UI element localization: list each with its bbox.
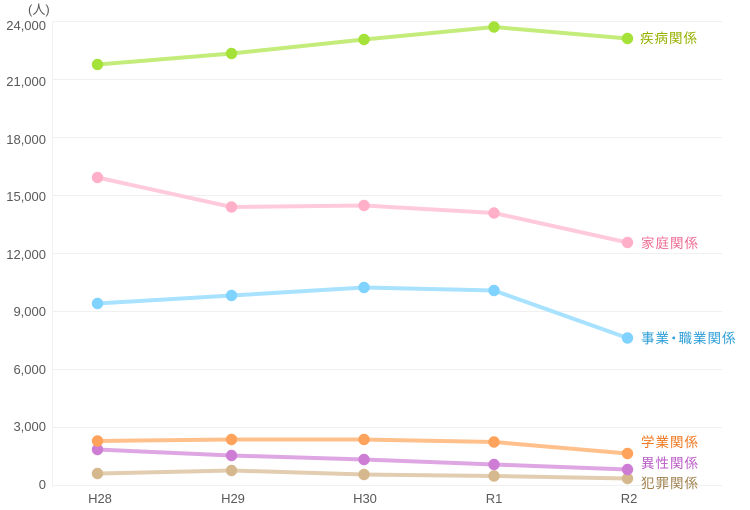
x axis labels: H28 [88, 491, 112, 506]
y axis labels: 12,000 [6, 247, 46, 262]
series: 事業・職業関係: 事業・職業関係 [641, 331, 736, 346]
series: 学業関係: 学業関係 [641, 435, 699, 450]
series: 事業・職業関係 [92, 282, 737, 346]
series: 異性関係 [92, 444, 699, 475]
x axis labels [88, 491, 637, 506]
y axis labels: 21,000 [6, 74, 46, 89]
y axis labels: 9,000 [13, 304, 46, 319]
x axis labels: H29 [221, 491, 245, 506]
x axis labels: R1 [486, 491, 502, 506]
x axis labels: H30 [353, 491, 377, 506]
y axis labels: 15,000 [6, 189, 46, 204]
y axis labels: 18,000 [6, 132, 46, 147]
series: 疾病関係 [92, 21, 698, 70]
series: 犯罪関係: 犯罪関係 [641, 476, 699, 491]
y axis labels: 24,000 [6, 18, 46, 33]
series: 異性関係: 異性関係 [641, 456, 699, 471]
series: 家庭関係: 家庭関係 [641, 235, 699, 251]
y axis labels: 3,000 [13, 419, 46, 434]
series: 疾病関係: 疾病関係 [640, 31, 698, 46]
series: 家庭関係 [92, 172, 699, 251]
y axis labels: 0 [39, 477, 46, 492]
series: 学業関係 [92, 434, 699, 459]
series: 犯罪関係 [92, 465, 699, 491]
y axis unit: (人) [28, 2, 50, 17]
y axis labels: 6,000 [13, 362, 46, 377]
y axis labels [6, 18, 46, 492]
x axis labels: R2 [621, 491, 637, 506]
